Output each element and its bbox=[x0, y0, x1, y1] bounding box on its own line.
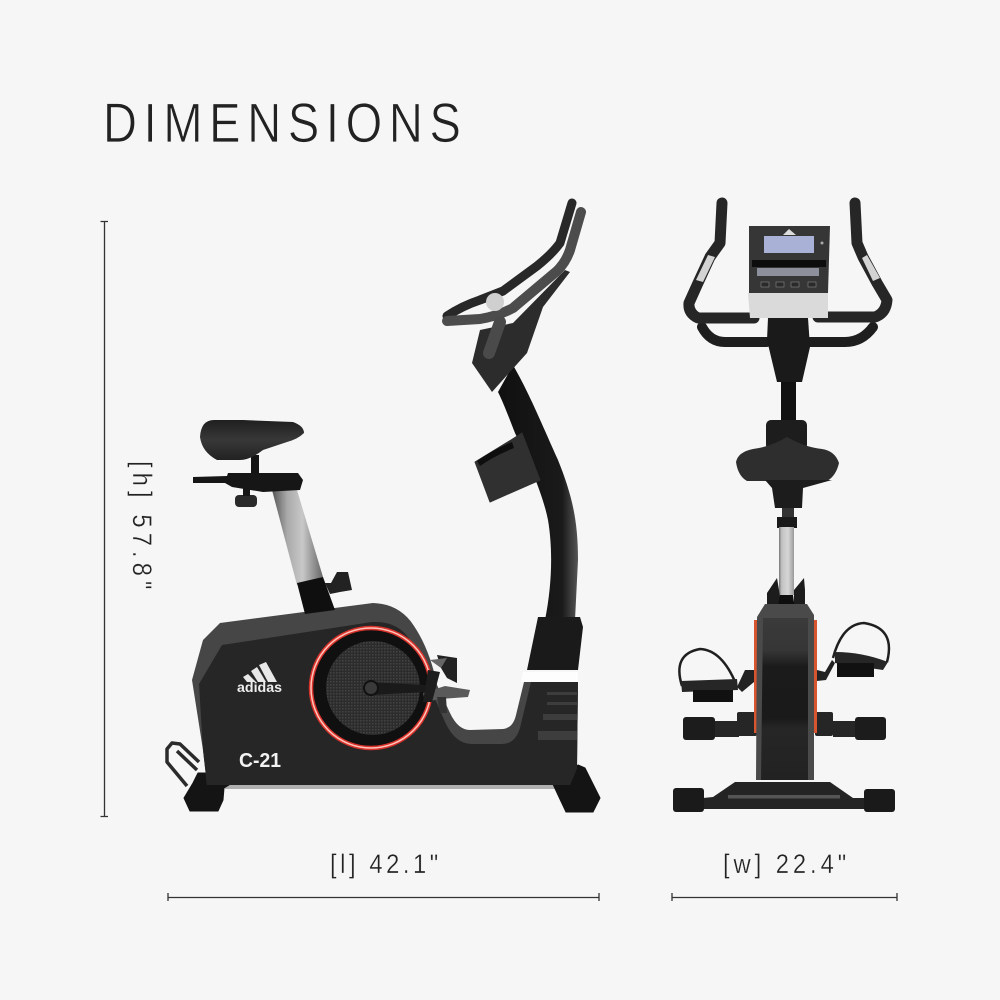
stem bbox=[781, 382, 796, 424]
height dimension line bbox=[100, 221, 108, 817]
upright column bbox=[498, 365, 578, 620]
seat post clamp bbox=[297, 577, 335, 614]
console logo bbox=[783, 229, 796, 235]
main housing bbox=[192, 603, 578, 785]
saddle bbox=[200, 420, 304, 460]
seat post clamp bbox=[765, 480, 832, 508]
rear foot bbox=[184, 773, 230, 811]
rear seat block bbox=[766, 420, 807, 450]
console bbox=[749, 226, 830, 293]
saddle bbox=[736, 437, 839, 481]
rear handlebar bbox=[447, 203, 572, 316]
front vents bbox=[538, 692, 577, 740]
base highlight bbox=[728, 795, 840, 798]
seat post bbox=[272, 490, 323, 585]
flywheel mesh disc bbox=[326, 641, 420, 735]
model name C-21: C-21 bbox=[239, 750, 281, 772]
lower bar bbox=[702, 327, 873, 342]
console display bbox=[764, 236, 814, 253]
base end caps bbox=[673, 788, 704, 812]
seat post bbox=[779, 527, 794, 595]
seat rail bbox=[193, 473, 303, 492]
front foot bbox=[552, 765, 600, 812]
crank arm bbox=[370, 682, 427, 695]
floor rail bbox=[225, 785, 560, 789]
main body bbox=[756, 604, 814, 780]
right chrome sensor bbox=[862, 255, 880, 281]
title: DIMENSIONS bbox=[103, 91, 461, 154]
base stabiliser bbox=[703, 782, 864, 809]
housing inner panel bbox=[199, 622, 578, 785]
length dimension line bbox=[168, 893, 599, 901]
chrome sensor bbox=[525, 272, 557, 303]
left handlebar bbox=[689, 203, 754, 318]
width label: [w] 22.4" bbox=[723, 850, 846, 879]
left pedal bbox=[679, 649, 754, 702]
seat stem bbox=[251, 455, 259, 474]
main body front bbox=[761, 618, 808, 780]
seat knob bbox=[235, 495, 257, 507]
console mount bbox=[472, 270, 570, 392]
right handlebar bbox=[818, 203, 887, 317]
rear stabiliser bbox=[683, 712, 886, 740]
side view of exercise bike bbox=[167, 203, 600, 812]
front handlebar bbox=[447, 212, 581, 321]
length label: [l] 42.1" bbox=[330, 850, 438, 879]
lower grip bbox=[489, 322, 500, 353]
adidas logo bbox=[237, 662, 282, 695]
post clamp bbox=[767, 578, 805, 604]
white band bbox=[521, 672, 578, 682]
stem head bbox=[767, 318, 810, 382]
chrome ring bbox=[486, 293, 504, 311]
bottle holder bbox=[475, 433, 540, 502]
front view of exercise bike bbox=[673, 203, 895, 812]
console buttons bbox=[761, 282, 816, 287]
red body edge bbox=[754, 620, 817, 733]
right pedal bbox=[817, 623, 889, 681]
post adjust knob bbox=[325, 572, 352, 594]
column collar bbox=[527, 617, 583, 670]
adidas logo: adidas bbox=[237, 680, 282, 695]
pedal bbox=[423, 655, 470, 713]
console silver bracket bbox=[748, 293, 828, 318]
left chrome sensor bbox=[696, 255, 715, 282]
flywheel red ring bbox=[311, 628, 431, 748]
height label: [h] 57.8" bbox=[127, 461, 156, 589]
width dimension line bbox=[672, 893, 897, 901]
rear stabiliser handle bbox=[167, 743, 199, 786]
